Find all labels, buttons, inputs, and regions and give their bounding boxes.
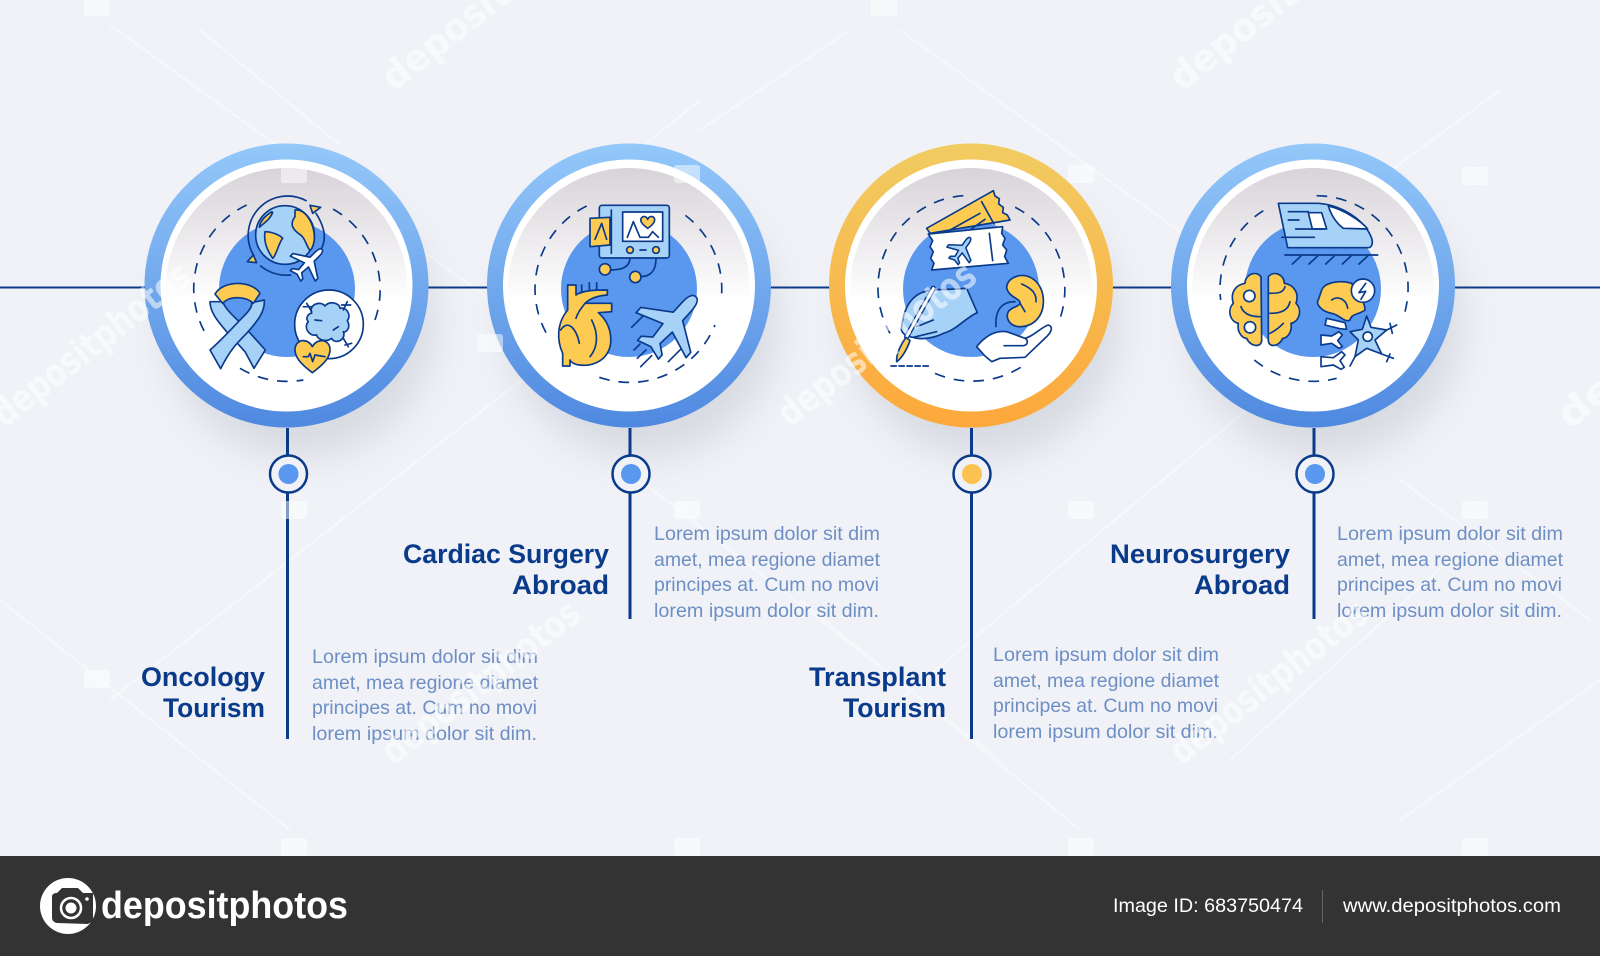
heading: oncology tourism: Tourism [163, 693, 265, 723]
circle 2 ring [487, 144, 771, 428]
icon: front ticket [928, 227, 1008, 270]
body text 3: lorem ipsum dolor sit dim. [993, 721, 1218, 743]
icon: kidney [996, 276, 1043, 327]
icon: open hand [977, 325, 1051, 362]
watermark camera icons [84, 0, 1488, 856]
logo mark [40, 878, 96, 934]
circle 1 face [160, 160, 412, 412]
heading: neurosurgery abroad: Neurosurgery [1110, 539, 1290, 569]
body text 4: lorem ipsum dolor sit dim. [1337, 600, 1562, 622]
step 4: neurosurgery [1171, 144, 1461, 457]
step 1: oncology tourism [144, 144, 435, 457]
body text 1: Lorem ipsum dolor sit dim [312, 646, 538, 668]
body text 1 [312, 646, 539, 745]
icon: train [1278, 203, 1378, 264]
icon: ribbon [210, 283, 265, 369]
body text 1: principes at. Cum no movi [312, 697, 537, 719]
body text 1: amet, mea regione diamet [312, 672, 539, 694]
icon: heart monitor [590, 205, 669, 283]
heading: cardiac surgery abroad: Cardiac Surgery [403, 539, 609, 569]
heading: neurosurgery abroad: Abroad [1194, 570, 1290, 600]
step 3: transplant tourism [829, 144, 1119, 457]
circle 1 shadow [165, 187, 435, 457]
circle 4 ring [1171, 144, 1455, 428]
connector node 3 [954, 428, 990, 739]
icon: vertebrae [1321, 318, 1347, 369]
circle 1 inner shade [166, 168, 408, 410]
connector node 4 [1296, 428, 1334, 619]
icon: plane over globe [283, 237, 334, 288]
footer bar [0, 856, 1600, 956]
circle 2 blue disc [561, 221, 697, 357]
body text 4: amet, mea regione diamet [1337, 549, 1564, 571]
body text 2: amet, mea regione diamet [654, 549, 881, 571]
icon: surgeon hand with scalpel [891, 288, 977, 366]
body text 3: amet, mea regione diamet [993, 670, 1220, 692]
icon: stimulated brain [1317, 279, 1375, 321]
horizontal timeline [0, 286, 1600, 288]
circle 3 shadow [849, 187, 1119, 457]
body text 3 [993, 644, 1220, 743]
circle 3 inner shade [850, 168, 1092, 410]
heading: oncology tourism: Oncology [141, 662, 265, 692]
heading: oncology tourism [141, 662, 265, 723]
circle 3 face [845, 160, 1097, 412]
dashed orbit [535, 206, 722, 382]
icon: heart pulse [295, 341, 330, 373]
dashed orbit [1220, 196, 1408, 381]
dashed orbit [878, 196, 1065, 381]
image id: Image ID: 683750474 [1113, 895, 1303, 917]
circle 1 ring [144, 144, 428, 428]
body text 2 [654, 523, 881, 622]
logo wordmark: depositphotos [101, 885, 348, 927]
icon group: cardiac [535, 205, 722, 382]
body text 3: principes at. Cum no movi [993, 695, 1218, 717]
circle 4 shadow [1191, 187, 1461, 457]
connector node 2 [612, 428, 650, 619]
watermarks: depositphotos [372, 591, 589, 773]
connector node 1 [270, 428, 307, 739]
icon group: neurosurgery [1220, 196, 1408, 381]
icon group: transplant [878, 191, 1065, 381]
heading: transplant tourism [809, 662, 946, 723]
icon: neuron [1350, 316, 1397, 366]
circle 1 blue disc [219, 221, 355, 357]
circle 2 shadow [507, 187, 777, 457]
circle 2 inner shade [508, 168, 750, 410]
body text 4 [1337, 523, 1564, 622]
body text 2: Lorem ipsum dolor sit dim [654, 523, 880, 545]
circle 2 face [503, 160, 755, 412]
circle 4 inner shade [1192, 168, 1434, 410]
circle 4 blue disc [1245, 221, 1381, 357]
icon group: oncology [194, 196, 380, 381]
body text 1: lorem ipsum dolor sit dim. [312, 723, 537, 745]
circle 4 face [1187, 160, 1439, 412]
body text 4: Lorem ipsum dolor sit dim [1337, 523, 1563, 545]
heading: cardiac surgery abroad: Abroad [512, 570, 609, 600]
heading: cardiac surgery abroad [403, 539, 609, 600]
circle 3 ring [829, 144, 1113, 428]
body text 3: Lorem ipsum dolor sit dim [993, 644, 1219, 666]
site url: www.depositphotos.com [1342, 895, 1561, 917]
watermarks: depositphotos [768, 253, 985, 435]
dashed orbit [194, 205, 380, 381]
body text 2: principes at. Cum no movi [654, 574, 879, 596]
icon: plane with speed lines [623, 274, 721, 372]
heading: neurosurgery abroad [1110, 539, 1290, 600]
icon: tumour cell [295, 290, 363, 359]
heading: transplant tourism: Transplant [809, 662, 946, 692]
icon: globe [247, 196, 324, 275]
icon: brain hemispheres [1230, 274, 1300, 345]
icon: anatomical heart [559, 283, 612, 366]
body text 2: lorem ipsum dolor sit dim. [654, 600, 879, 622]
icon: back ticket [927, 191, 1010, 233]
heading: transplant tourism: Tourism [843, 693, 946, 723]
step 2: cardiac surgery [487, 144, 777, 457]
circle 3 blue disc [903, 221, 1039, 357]
body text 4: principes at. Cum no movi [1337, 574, 1562, 596]
watermarks: depositphotos [1160, 591, 1377, 773]
